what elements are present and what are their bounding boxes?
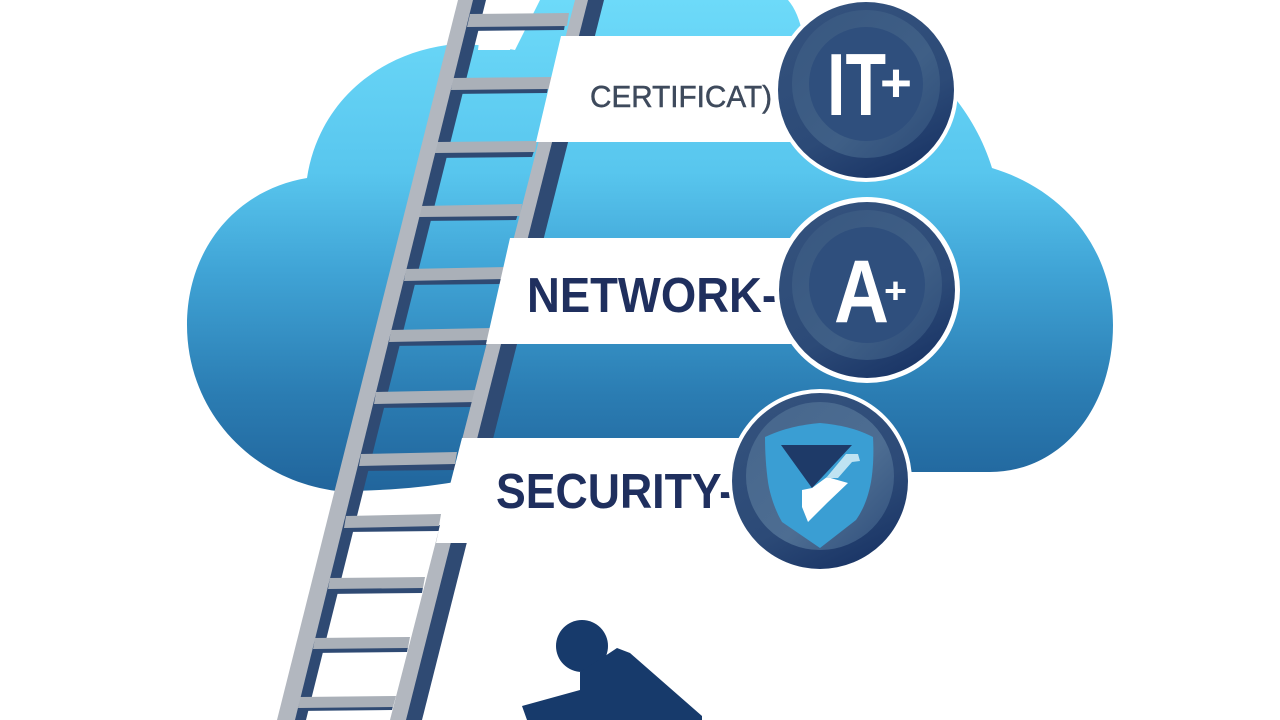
badge text: plus: + xyxy=(880,53,912,113)
person head xyxy=(556,620,608,672)
badge: IT+ xyxy=(774,0,958,182)
shield check streak xyxy=(826,454,860,478)
label: certification: CERTIFICAT) xyxy=(590,79,772,114)
ladder xyxy=(277,0,604,720)
label: security: SECURITY- xyxy=(496,465,734,519)
badge text: A: A xyxy=(834,241,889,341)
badge text: IT: IT xyxy=(827,35,886,134)
badge: A+ xyxy=(774,197,960,383)
shield xyxy=(765,423,873,548)
white gap behind ladder top xyxy=(478,0,535,50)
left rail xyxy=(277,0,473,720)
right rail shadow xyxy=(405,0,604,720)
person figure xyxy=(522,620,702,720)
badge text: plus sign: + xyxy=(884,270,907,311)
right rail xyxy=(390,0,588,720)
label: network: NETWORK- xyxy=(527,269,777,323)
banner: security xyxy=(436,438,790,543)
banner: network xyxy=(486,238,830,344)
badge: security shield xyxy=(725,389,915,580)
shield triangle xyxy=(781,445,852,488)
person body xyxy=(522,648,702,720)
left rail shadow xyxy=(288,0,486,720)
banner: certification xyxy=(536,36,830,142)
cloud background xyxy=(187,0,1113,491)
ladder rungs xyxy=(295,13,569,711)
shield check xyxy=(802,477,848,522)
